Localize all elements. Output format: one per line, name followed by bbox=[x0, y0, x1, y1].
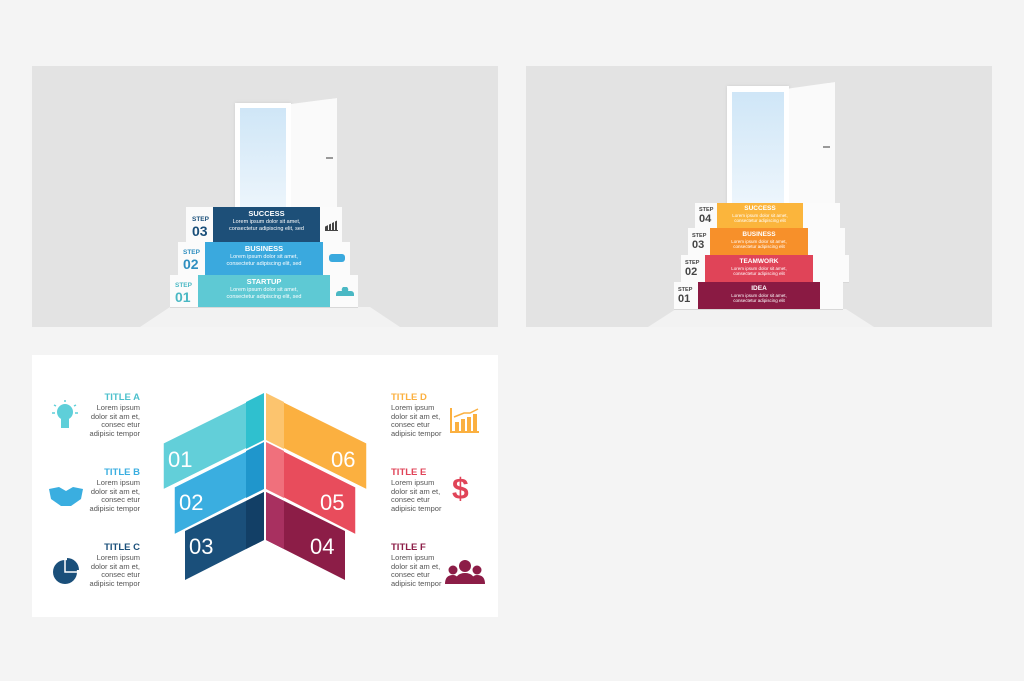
panel: three-step stairs bbox=[32, 66, 498, 327]
chevron chart bbox=[164, 393, 366, 580]
text: title B: TITLE B bbox=[104, 467, 140, 478]
text: title E bbox=[391, 467, 442, 513]
step 04 bbox=[695, 203, 840, 228]
text: title C: consec etur bbox=[101, 570, 140, 579]
icon: handshake bbox=[49, 487, 83, 506]
step 01: STEP bbox=[678, 287, 692, 293]
step 01: Lorem ipsum dolor sit amet, bbox=[230, 287, 298, 293]
text: title D bbox=[391, 392, 442, 438]
panel: four-step stairs bbox=[526, 66, 992, 327]
step 03 bbox=[688, 228, 845, 255]
text: title E: consec etur bbox=[391, 495, 430, 504]
text: title D: Lorem ipsum bbox=[391, 403, 434, 412]
step 02: 02 bbox=[685, 266, 697, 278]
step 02: STEP bbox=[685, 260, 699, 266]
step 04: Lorem ipsum dolor sit amet, bbox=[732, 213, 788, 218]
step 04: SUCCESS bbox=[744, 205, 776, 212]
text: title F: consec etur bbox=[391, 570, 430, 579]
step 03: STEP bbox=[192, 216, 209, 223]
text: title B: Lorem ipsum bbox=[97, 478, 140, 487]
step 01: 01 bbox=[175, 288, 191, 304]
step 01: consectetur adipiscing elit, sed bbox=[227, 294, 301, 300]
door bbox=[234, 98, 337, 207]
icon: people bbox=[445, 560, 485, 584]
text: title C: adipisic tempor bbox=[90, 579, 140, 588]
step 03: Lorem ipsum dolor sit amet, bbox=[233, 219, 300, 225]
step 01: Lorem ipsum dolor sit amet, bbox=[731, 293, 787, 298]
text: title A: adipisic tempor bbox=[90, 429, 140, 438]
text: title E: TITLE E bbox=[391, 467, 426, 478]
chevron chart: 03 bbox=[189, 534, 213, 559]
step 03 bbox=[186, 207, 342, 242]
floor bbox=[140, 307, 400, 327]
step 02: consectetur adipiscing elit, sed bbox=[227, 260, 301, 266]
icon: dollar: $ bbox=[452, 473, 469, 506]
text: title C bbox=[90, 542, 140, 588]
text: title A bbox=[90, 392, 140, 438]
step 04: consectetur adipiscing elit bbox=[734, 218, 786, 223]
text: title E: Lorem ipsum bbox=[391, 478, 434, 487]
text: title C: dolor sit am et, bbox=[91, 562, 140, 571]
step 01 bbox=[170, 275, 358, 308]
text: title E: dolor sit am et, bbox=[391, 487, 440, 496]
step 04: 04 bbox=[699, 212, 711, 224]
text: title A: Lorem ipsum bbox=[97, 403, 140, 412]
text: title B: consec etur bbox=[101, 495, 140, 504]
step 02 bbox=[178, 242, 350, 275]
step 03: consectetur adipiscing elit bbox=[733, 244, 785, 249]
text: title E: adipisic tempor bbox=[391, 504, 441, 513]
text: title F: Lorem ipsum bbox=[391, 553, 434, 562]
chevron chart: 04 bbox=[310, 534, 334, 559]
icon: pie chart bbox=[53, 558, 79, 584]
chevron chart: 01 bbox=[168, 447, 192, 472]
step 04: STEP bbox=[699, 207, 713, 213]
text: title A: TITLE A bbox=[104, 392, 140, 403]
step 03: STEP bbox=[692, 233, 706, 239]
text: title D: adipisic tempor bbox=[391, 429, 441, 438]
text: title D: consec etur bbox=[391, 420, 430, 429]
step 02: 02 bbox=[183, 256, 199, 272]
step 03: 03 bbox=[192, 222, 208, 238]
text: title F: dolor sit am et, bbox=[391, 562, 440, 571]
step 01: IDEA bbox=[751, 285, 767, 292]
text: title D: TITLE D bbox=[391, 392, 427, 403]
step 02: BUSINESS bbox=[245, 244, 283, 253]
text: title A: dolor sit am et, bbox=[91, 412, 140, 421]
icon: lightbulb bbox=[52, 400, 78, 428]
text: title C: TITLE C bbox=[104, 542, 140, 553]
step 03: Lorem ipsum dolor sit amet, bbox=[731, 239, 787, 244]
text: title B: adipisic tempor bbox=[90, 504, 140, 513]
text: title A: consec etur bbox=[101, 420, 140, 429]
step 01: STARTUP bbox=[247, 277, 281, 286]
step 02: consectetur adipiscing elit bbox=[733, 271, 785, 276]
step 03: 03 bbox=[692, 238, 704, 250]
text: title C: Lorem ipsum bbox=[97, 553, 140, 562]
text: title F bbox=[391, 542, 442, 588]
step 02: TEAMWORK bbox=[740, 258, 778, 265]
step 01 bbox=[674, 282, 843, 310]
icon: bar chart bbox=[450, 408, 479, 433]
step 01: STEP bbox=[175, 282, 192, 289]
text: title F: adipisic tempor bbox=[391, 579, 441, 588]
floor bbox=[648, 309, 874, 327]
text: title F: TITLE F bbox=[391, 542, 426, 553]
step 02: Lorem ipsum dolor sit amet, bbox=[731, 266, 787, 271]
step 01: 01 bbox=[678, 292, 690, 304]
step 02: Lorem ipsum dolor sit amet, bbox=[230, 254, 298, 260]
step 01: consectetur adipiscing elit bbox=[733, 298, 785, 303]
panel: chevron infographic bbox=[32, 355, 498, 617]
chevron chart: 02 bbox=[179, 490, 203, 515]
step 03: consectetur adipiscing elit, sed bbox=[229, 226, 304, 232]
text: title B bbox=[90, 467, 140, 513]
step 02: STEP bbox=[183, 249, 200, 256]
step 03: BUSINESS bbox=[742, 231, 776, 238]
text: title B: dolor sit am et, bbox=[91, 487, 140, 496]
chevron chart: 06 bbox=[331, 447, 355, 472]
door bbox=[726, 82, 835, 203]
text: title D: dolor sit am et, bbox=[391, 412, 440, 421]
step 03: SUCCESS bbox=[248, 209, 285, 218]
chevron chart: 05 bbox=[320, 490, 344, 515]
step 02 bbox=[681, 255, 849, 283]
